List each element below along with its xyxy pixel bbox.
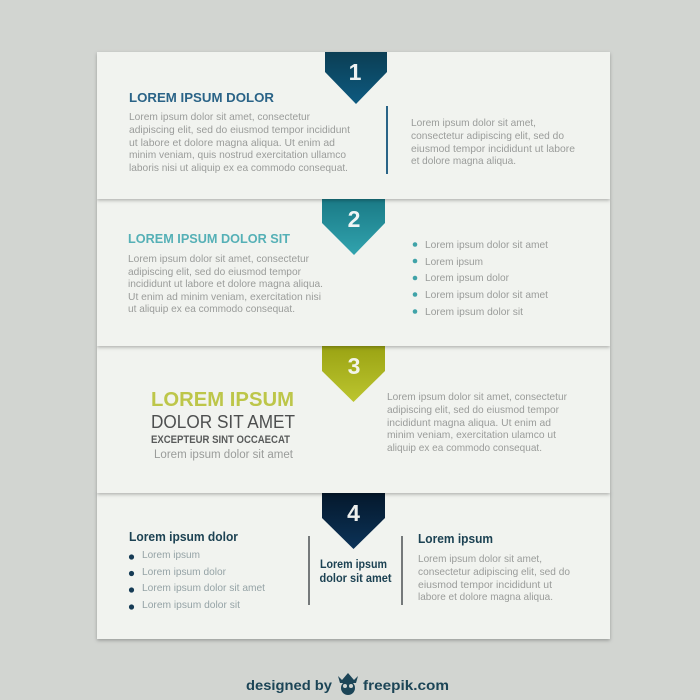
text block: section 4 right: eiusmod tempor incididunt ut (418, 579, 552, 591)
panel: section 1 (97, 52, 610, 199)
text block: section 1 left: adipiscing elit, sed do eiusmod tempor incididunt (129, 124, 350, 136)
text block: section 1 right (411, 117, 575, 167)
heading: LOREM IPSUM DOLOR SIT (128, 231, 290, 246)
bullet list: section 2: Lorem ipsum (425, 256, 483, 268)
text block: section 1 left (129, 111, 350, 174)
headline: EXCEPTEUR SINT OCCAECAT (151, 434, 290, 446)
bullet list: section 4: Lorem ipsum dolor sit amet (142, 582, 265, 594)
footer: freepik credit: designed by (246, 677, 332, 693)
icon: arrow badge 2: 2 (348, 206, 360, 232)
divider right (401, 536, 403, 605)
left heading: Lorem ipsum dolor: Lorem ipsum dolor (129, 529, 238, 544)
bullet list: section 4: Lorem ipsum (142, 549, 200, 561)
text block: section 3 right: adipiscing elit, sed do eiusmod tempor (387, 404, 559, 416)
text block: section 2 left: Lorem ipsum dolor sit amet, consectetur (128, 253, 309, 265)
bullet list: section 2: Lorem ipsum dolor sit amet (425, 239, 548, 251)
text block: section 1 left: laboris nisi ut aliquip ex ea commodo consequat. (129, 162, 348, 174)
bullet list: section 2: Lorem ipsum dolor (425, 272, 509, 284)
bullet list: section 2 (413, 239, 548, 318)
text block: section 1 left: ut labore et dolore magna aliqua. Ut enim ad (129, 137, 335, 149)
right heading: Lorem ipsum: Lorem ipsum (418, 531, 493, 546)
text block: section 4 right: labore et dolore magna aliqua. (418, 591, 553, 603)
footer: freepik credit: freepik.com (363, 677, 449, 693)
divider left (308, 536, 310, 605)
text block: section 4 right: consectetur adipiscing elit, sed do (418, 566, 570, 578)
text block: section 1 right: Lorem ipsum dolor sit amet, (411, 117, 536, 129)
icon: arrow badge 1: 1 (349, 59, 362, 85)
text block: section 2 left: adipiscing elit, sed do eiusmod tempor (128, 266, 301, 278)
text block: section 1 left: minim veniam, quis nostrud exercitation ullamco (129, 149, 346, 161)
icon: arrow badge 3: 3 (348, 353, 360, 379)
text block: section 3 right: incididunt magna aliqua. Ut enim ad (387, 417, 551, 429)
text block: section 4 right: Lorem ipsum dolor sit amet, (418, 553, 542, 565)
icon: arrow badge 4: 4 (347, 500, 360, 526)
bullet list: section 4 (129, 549, 265, 611)
panel: section 4 (97, 492, 610, 639)
panel: section 3 (97, 346, 610, 493)
bullet list: section 4: Lorem ipsum dolor (142, 566, 226, 578)
text block: section 4 right (418, 553, 570, 603)
text block: section 2 left: incididunt ut labore et dolore magna aliqua. (128, 278, 323, 290)
text block: section 3 right (387, 391, 567, 454)
text block: section 3 right: Lorem ipsum dolor sit amet, consectetur (387, 391, 567, 403)
heading: LOREM IPSUM DOLOR (129, 90, 275, 105)
bullet list: section 2: Lorem ipsum dolor sit amet (425, 289, 548, 301)
text block: section 3 right: aliquip ex ea commodo consequat. (387, 442, 542, 454)
panel: section 2 (97, 199, 610, 346)
divider (386, 106, 388, 174)
bullet list: section 2: Lorem ipsum dolor sit (425, 306, 523, 318)
center label: Lorem ipsum (320, 557, 387, 571)
center label (320, 557, 392, 585)
icon: arrow badge 2 (322, 199, 385, 255)
icon: arrow badge 4 (322, 493, 385, 549)
icon: arrow badge 3 (322, 346, 385, 402)
text block: section 1 right: eiusmod tempor incididunt ut labore (411, 143, 575, 155)
icon: freepik logo (338, 673, 358, 695)
headline: LOREM IPSUM (151, 389, 294, 411)
text block: section 3 right: minim veniam, exercitation ulamco ut (387, 429, 556, 441)
headline (151, 389, 295, 461)
text block: section 1 left: Lorem ipsum dolor sit amet, consectetur (129, 111, 310, 123)
center label: dolor sit amet (320, 571, 392, 585)
text block: section 2 left (128, 253, 323, 315)
bullet list: section 4: Lorem ipsum dolor sit (142, 599, 240, 611)
text block: section 2 left: Ut enim ad minim veniam, exercitation nisi (128, 291, 321, 303)
headline: DOLOR SIT AMET (151, 412, 295, 432)
icon: arrow badge 1 (325, 52, 387, 104)
headline: Lorem ipsum dolor sit amet (154, 449, 294, 461)
text block: section 1 right: consectetur adipiscing elit, sed do (411, 130, 564, 142)
text block: section 1 right: et dolore magna aliqua. (411, 155, 516, 167)
footer: freepik credit (246, 673, 449, 695)
text block: section 2 left: ut aliquip ex ea commodo consequat. (128, 303, 295, 315)
